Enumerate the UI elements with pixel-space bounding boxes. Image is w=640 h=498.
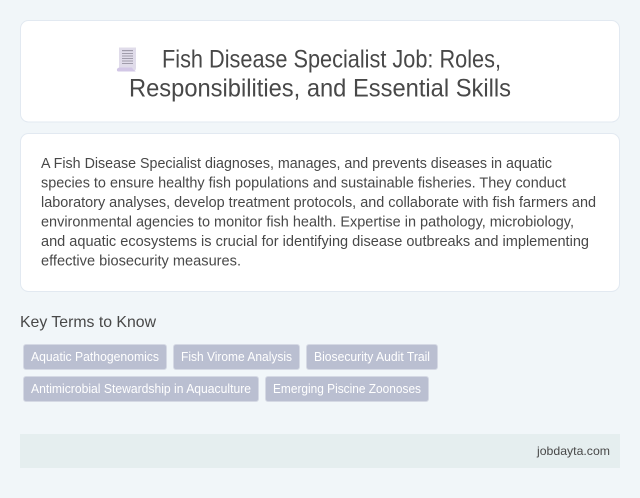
- icon: paper scroll: [117, 48, 136, 72]
- title heading: [129, 46, 511, 102]
- tag: biosecurity audit trail: [306, 344, 438, 370]
- tag: antimicrobial stewardship: [24, 376, 258, 402]
- tag: emerging piscine zoonoses: [266, 376, 428, 402]
- tag: antimicrobial stewardship: Antimicrobial Stewardship in Aquaculture: [31, 382, 251, 396]
- description text: and aquatic ecosystems is crucial for identifying disease outbreaks and implementing: [41, 234, 589, 250]
- footer bar: jobdayta.com: [536, 444, 610, 458]
- title panel: [20, 20, 620, 122]
- tag: biosecurity audit trail: Biosecurity Audit Trail: [314, 350, 430, 364]
- description text: effective biosecurity measures.: [41, 254, 241, 270]
- description text: A Fish Disease Specialist diagnoses, manages, and prevents diseases in aquatic: [41, 156, 552, 172]
- description text: environmental agencies to monitor fish health. Expertise in pathology, microbiology,: [41, 214, 574, 230]
- tag: emerging piscine zoonoses: Emerging Piscine Zoonoses: [273, 382, 421, 396]
- tag: aquatic pathogenomics: Aquatic Pathogenomics: [31, 350, 159, 364]
- title heading: Fish Disease Specialist Job: Roles,: [162, 46, 501, 74]
- description text: laboratory analyses, develop treatment protocols, and collaborate with fish farmers and: [41, 195, 596, 211]
- tag: fish virome analysis: Fish Virome Analysis: [181, 350, 292, 364]
- tag: fish virome analysis: [174, 344, 300, 370]
- heading: key terms: Key Terms to Know: [20, 314, 156, 331]
- footer bar: [20, 434, 620, 468]
- panel: description: [20, 134, 620, 292]
- description text: [41, 156, 596, 270]
- tag: aquatic pathogenomics: [24, 344, 166, 370]
- key term tags: [24, 344, 438, 402]
- title heading: Responsibilities, and Essential Skills: [129, 74, 511, 102]
- description text: species to ensure healthy fish populations and sustainable fisheries. They conduct: [41, 176, 566, 192]
